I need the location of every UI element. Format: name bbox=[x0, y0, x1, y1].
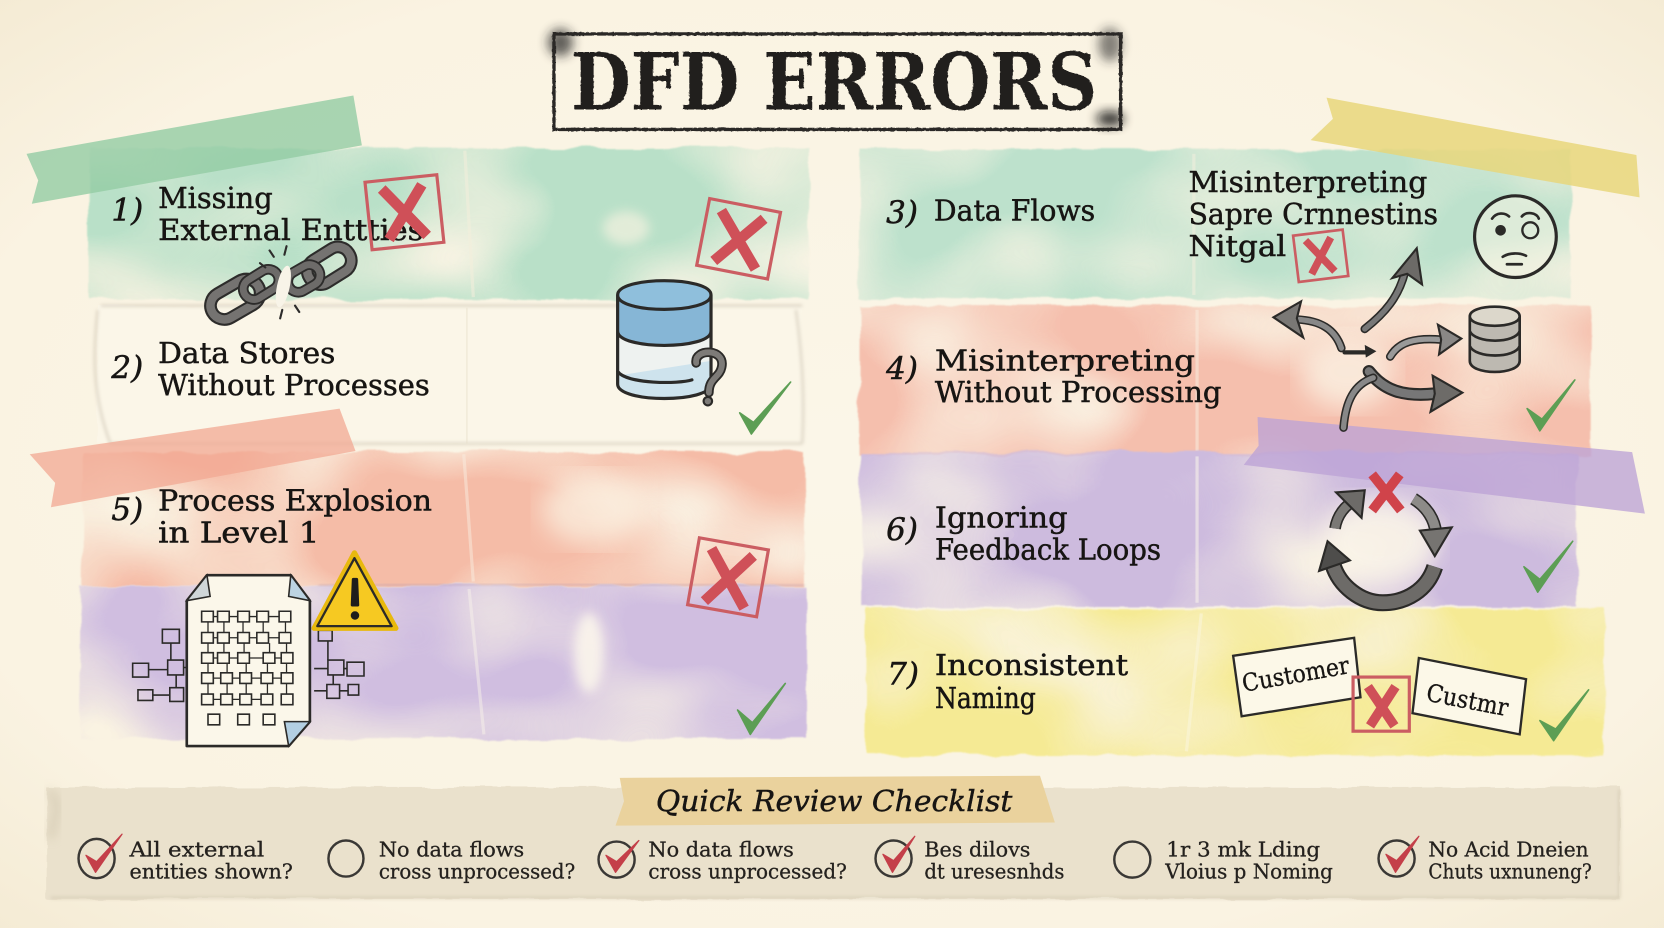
item 6: Ignoring bbox=[935, 500, 1068, 534]
icon: exploded process document bbox=[187, 575, 310, 746]
checklist item 2 bbox=[328, 837, 575, 884]
icon: warning triangle bbox=[314, 553, 396, 628]
arrows: data flow scatter bbox=[1273, 248, 1462, 428]
panel: green card left bbox=[89, 149, 809, 299]
checklist item 6: Chuts uxnuneng? bbox=[1428, 860, 1592, 884]
label box: Custmr bbox=[1412, 658, 1526, 734]
item 4 bbox=[885, 343, 1221, 409]
item 3: Data Flows bbox=[934, 194, 1095, 228]
garbled note text: Sapre Crnnestins bbox=[1189, 197, 1438, 231]
item 5 bbox=[111, 483, 432, 549]
garbled note text bbox=[1189, 165, 1438, 263]
item 4: Misinterpreting bbox=[935, 343, 1195, 377]
icon: small gray database bbox=[1469, 307, 1520, 372]
icon: database with question mark bbox=[618, 280, 722, 405]
tape: purple bbox=[1244, 417, 1645, 514]
item 1: Missing bbox=[158, 181, 273, 215]
item 2: Data Stores bbox=[158, 336, 335, 370]
checklist title label: Quick Review Checklist bbox=[656, 784, 1013, 818]
panel: salmon card right bbox=[860, 306, 1590, 454]
item 2: 2) bbox=[110, 350, 143, 386]
item 5: in Level 1 bbox=[158, 515, 319, 549]
checklist item 3: cross unprocessed? bbox=[648, 860, 847, 884]
checklist item 5: 1r 3 mk Lding bbox=[1166, 837, 1320, 861]
checklist title label bbox=[616, 776, 1055, 826]
label box: Custmr: Custmr bbox=[1424, 678, 1511, 722]
item 7: Inconsistent bbox=[935, 648, 1129, 682]
checklist item 4: Bes dilovs bbox=[924, 837, 1030, 861]
label box: Customer: Customer bbox=[1240, 650, 1352, 698]
checklist item 3: No data flows bbox=[648, 837, 794, 861]
checklist item 4 bbox=[876, 836, 1064, 884]
stamp: red X 3 bbox=[1293, 230, 1348, 282]
item 6 bbox=[886, 500, 1161, 566]
item 1 bbox=[111, 181, 423, 247]
checklist item 6 bbox=[1379, 836, 1592, 884]
icon: side flow nodes right bbox=[314, 630, 364, 698]
checklist item 1: entities shown? bbox=[129, 860, 293, 884]
tape: yellow bbox=[1311, 98, 1640, 197]
icon: confused face bbox=[1475, 196, 1556, 278]
checklist item 2: No data flows bbox=[379, 837, 524, 861]
check mark bbox=[1540, 690, 1589, 741]
title: DFD ERRORS bbox=[571, 35, 1097, 128]
checklist item 1 bbox=[79, 834, 293, 884]
item 2: Without Processes bbox=[158, 368, 430, 402]
checklist item 3 bbox=[599, 837, 847, 884]
check mark bbox=[738, 683, 785, 734]
item 5: 5) bbox=[111, 492, 143, 528]
stamp: red X 7 bbox=[1353, 677, 1409, 731]
tape: green bbox=[27, 96, 362, 204]
item 7: Naming bbox=[935, 681, 1036, 715]
item 3: 3) bbox=[886, 195, 918, 231]
icon: broken feedback loop bbox=[1319, 474, 1452, 603]
check mark bbox=[740, 382, 791, 434]
checklist item 6: No Acid Dneien bbox=[1428, 837, 1589, 861]
item 2 bbox=[110, 336, 430, 402]
checklist item 4: dt uresesnhds bbox=[924, 860, 1064, 884]
checklist item 1: All external bbox=[128, 837, 264, 861]
item 6: 6) bbox=[886, 512, 918, 548]
label box: Customer bbox=[1233, 638, 1360, 716]
item 6: Feedback Loops bbox=[935, 532, 1161, 566]
item 1: 1) bbox=[111, 193, 143, 229]
panel: purple card left bbox=[81, 584, 807, 739]
item 7: 7) bbox=[887, 656, 919, 692]
item 4: 4) bbox=[885, 351, 918, 387]
stamp: red X 1 bbox=[365, 175, 444, 250]
panel: salmon card left bbox=[83, 452, 804, 586]
checklist item 5 bbox=[1114, 837, 1333, 884]
garbled note text: Misinterpreting bbox=[1189, 165, 1427, 199]
stamp: red X 2 bbox=[697, 199, 781, 279]
panel: checklist strip bbox=[47, 787, 1619, 899]
panel: cream card bbox=[95, 306, 803, 444]
checklist item 2: cross unprocessed? bbox=[379, 860, 575, 884]
stamp: red X 5 bbox=[688, 538, 768, 617]
tape: salmon bbox=[30, 409, 356, 507]
icon: side flow nodes left bbox=[133, 629, 187, 701]
item 1: External Enttties bbox=[158, 213, 423, 247]
item 7 bbox=[887, 648, 1129, 715]
item 4: Without Processing bbox=[935, 375, 1221, 409]
panel: yellow card right bbox=[866, 609, 1605, 756]
garbled note text: Nitgal bbox=[1189, 229, 1286, 263]
item 5: Process Explosion bbox=[158, 483, 432, 517]
check mark bbox=[1527, 380, 1575, 431]
checklist item 5: Vloius p Noming bbox=[1164, 860, 1333, 884]
panel: purple card right bbox=[862, 452, 1577, 607]
panel: green card right bbox=[860, 150, 1571, 298]
check mark bbox=[1524, 541, 1573, 592]
icon: broken chain bbox=[205, 242, 356, 324]
